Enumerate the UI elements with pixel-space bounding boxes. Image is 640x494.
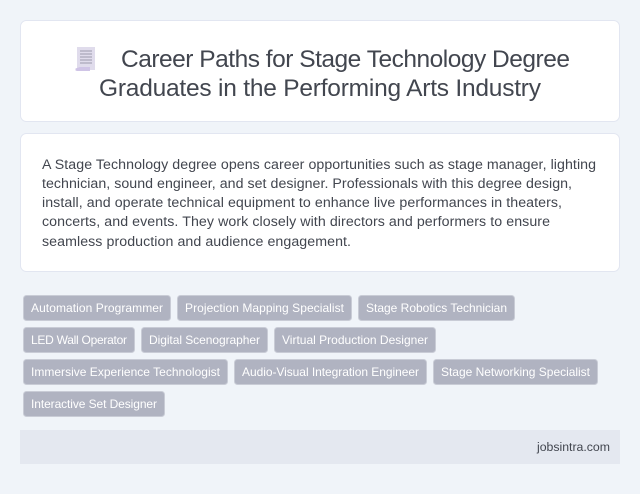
icon: document scroll: [76, 47, 95, 71]
panel: description: A Stage Technology degree opens career opportunities such as stage manager, lighting: [42, 157, 596, 173]
tag: LED Wall Operator: LED Wall Operator: [31, 333, 127, 347]
tag: Audio-Visual Integration Engineer: Audio-Visual Integration Engineer: [242, 365, 419, 379]
tag: Digital Scenographer: [142, 328, 268, 352]
title: [99, 46, 570, 102]
title: Career Paths for Stage Technology Degree: [121, 46, 570, 73]
tag: Stage Robotics Technician: [358, 296, 514, 320]
tag: Stage Networking Specialist: Stage Networking Specialist: [441, 365, 591, 379]
panel: description: concerts, and events. They work closely with directors and performers to ensure: [42, 214, 550, 230]
tag: Projection Mapping Specialist: Projection Mapping Specialist: [185, 301, 345, 315]
tag: Projection Mapping Specialist: [178, 296, 352, 320]
panel: description: install, and operate technical equipment to enhance live performances in theaters,: [42, 195, 562, 211]
footer: jobsintra.com: [536, 440, 610, 454]
footer: [20, 430, 620, 464]
title: Graduates in the Performing Arts Industry: [99, 75, 542, 102]
panel: description: seamless production and audience engagement.: [42, 234, 351, 250]
tag: Interactive Set Designer: [24, 392, 164, 416]
tag: Automation Programmer: Automation Programmer: [31, 301, 163, 315]
tag: Automation Programmer: [24, 296, 170, 320]
tag: Immersive Experience Technologist: Immersive Experience Technologist: [31, 365, 221, 379]
panel: description: [20, 134, 620, 272]
tag: Stage Networking Specialist: [434, 360, 598, 384]
tags: career paths: [24, 296, 598, 416]
tag: Interactive Set Designer: Interactive Set Designer: [31, 397, 157, 411]
tag: Virtual Production Designer: Virtual Production Designer: [282, 333, 428, 347]
tag: Audio-Visual Integration Engineer: [234, 360, 426, 384]
panel: description: technician, sound engineer, and set designer. Professionals with this degree design,: [42, 176, 572, 192]
panel: title card: [20, 20, 620, 122]
tag: Virtual Production Designer: [274, 328, 436, 352]
tag: Digital Scenographer: Digital Scenographer: [149, 333, 260, 347]
tag: LED Wall Operator: [24, 328, 134, 352]
tag: Stage Robotics Technician: Stage Robotics Technician: [366, 301, 507, 315]
tag: Immersive Experience Technologist: [24, 360, 228, 384]
